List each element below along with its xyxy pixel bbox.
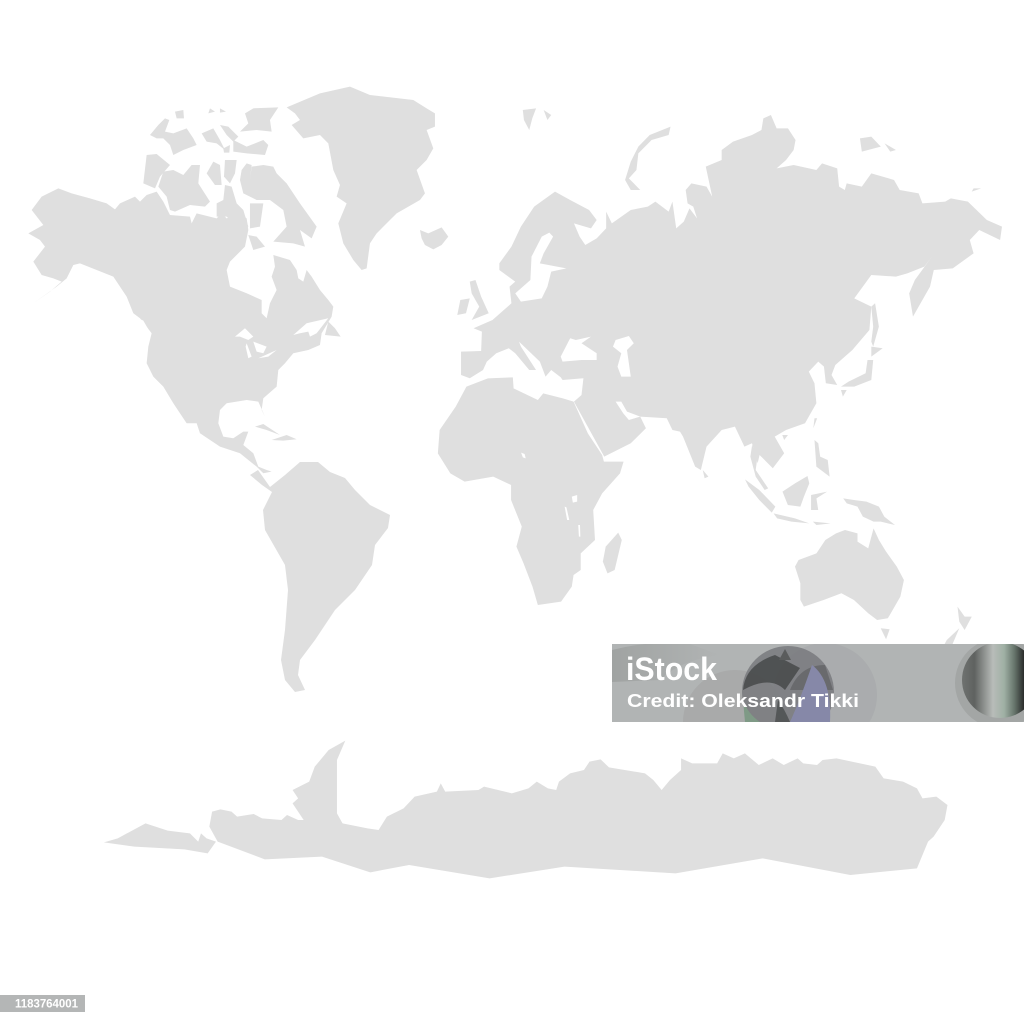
malay peninsula [750,445,768,490]
africa [438,377,624,605]
antarctica [104,741,947,878]
north america and arctic islands [28,87,448,473]
iceland [420,227,448,249]
inland seas [515,233,640,420]
south america [250,462,390,692]
australia [795,528,904,620]
indonesian islands [745,476,895,525]
antarctic mainland [209,741,947,878]
mainland north america [28,188,333,473]
banner abstract shapes [612,644,1024,722]
arctic archipelagos [523,108,981,192]
arctic islands [143,107,317,250]
taiwan philippines sri lanka hainan [703,418,830,478]
eurasia and pacific islands [457,108,1002,478]
african lakes [521,453,580,537]
caribbean islands [255,424,297,441]
image id tag [0,995,85,1012]
greenland [287,87,435,270]
image id tag: 1183764001 [15,998,79,1010]
madagascar [603,533,622,573]
japan and sakhalin [841,303,883,397]
africa australia and indonesia [438,377,972,650]
antarctic west section [104,823,216,853]
eurasian mainland [461,115,1002,470]
newfoundland [325,322,341,337]
new zealand [941,607,972,650]
istock credit banner [612,644,1024,722]
british isles [457,280,489,320]
white great lakes and gulf [138,318,328,425]
istock logo text: iStock [626,651,717,687]
credit line: Credit: Oleksandr Tikki [627,691,859,711]
tasmania [881,628,890,639]
